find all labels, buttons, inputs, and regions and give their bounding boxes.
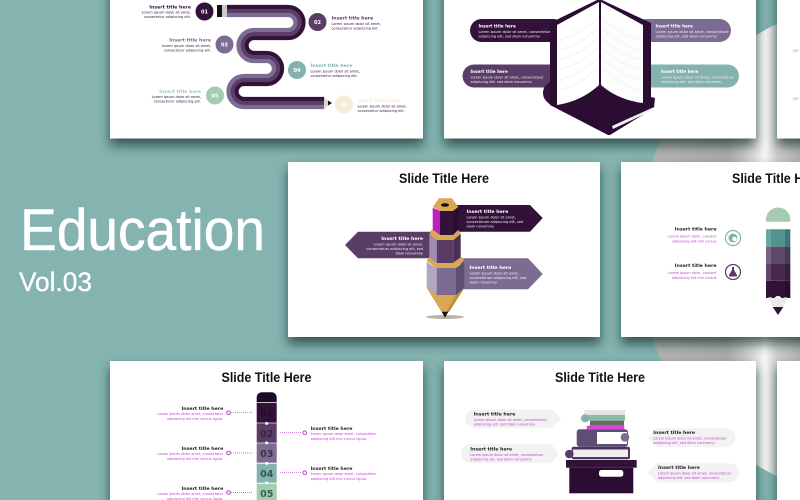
pill bottom right: adipiscing elit, sed diam nonummy	[661, 80, 722, 84]
pill bottom left: adipiscing elit, sed diam nonummy	[470, 80, 532, 84]
bubble 4	[648, 463, 739, 482]
icon: stacked pencil	[426, 198, 464, 319]
label 02: Insert title here	[311, 426, 352, 432]
item: flask: adipiscing elit min cursus	[672, 276, 717, 280]
slide panel: book stack	[444, 361, 756, 500]
slide panel: vertical pencil	[621, 162, 800, 337]
label 04	[280, 466, 377, 481]
label 05: Insert title here	[182, 486, 223, 492]
item: flask	[668, 263, 740, 280]
heading: Slide Title Here	[555, 370, 645, 385]
step 03: consectetur adipiscing elit.	[164, 48, 211, 52]
subtitle: Vol.03	[19, 267, 92, 297]
item: globe	[668, 226, 740, 246]
bubble 1	[466, 409, 561, 428]
heading: Slide Title Here	[222, 370, 312, 385]
arrow: bottom right: consectetuer adipiscing elit, sed	[470, 276, 526, 280]
arrow: bottom right: diam nonummy	[470, 280, 497, 284]
arrow: middle left: Lorem ipsum dolor sit amet,	[374, 242, 423, 246]
label 01: Insert title here	[182, 406, 223, 412]
label 04: adipiscing elit min cursus ligula.	[311, 477, 367, 481]
item: globe: Insert title here	[675, 226, 716, 232]
step 05: Lorem ipsum dolor sit amet,	[152, 95, 201, 99]
step 04	[288, 61, 360, 79]
pill top right	[635, 19, 731, 42]
bubble 2: adipiscing elit, sed diam nonummy	[470, 458, 532, 462]
step 03	[162, 36, 234, 54]
numbered column: 01	[260, 408, 273, 420]
label 01: Lorem ipsum dolor amet, consectetur	[157, 412, 224, 416]
step 01	[142, 2, 214, 20]
pill bottom right: Lorem ipsum dolor sit amet, consectetuer	[661, 76, 735, 80]
step 04: 04	[294, 68, 301, 74]
arrow: bottom right	[460, 258, 543, 289]
arrow: top right	[453, 205, 543, 232]
item: globe: adipiscing elit min cursus	[672, 240, 717, 244]
label 03: Lorem ipsum dolor amet, consectetur	[157, 452, 224, 456]
step 04: consectetur adipiscing elit.	[310, 74, 358, 78]
step 03: Insert title here	[169, 38, 211, 44]
step 03: Lorem ipsum dolor sit amet,	[162, 44, 211, 48]
label 05	[157, 486, 253, 500]
item: globe: Lorem ipsum dolor, consect	[668, 234, 717, 238]
step 02	[308, 13, 381, 31]
label 03: adipiscing elit min cursus ligula.	[167, 457, 223, 461]
bubble 2: Lorem ipsum dolor sit amet, consectetuer	[470, 453, 544, 457]
step 02: 02	[314, 20, 321, 26]
bubble 4: Insert title here	[658, 465, 700, 471]
arrow: top right: consectetuer adipiscing elit, sed	[466, 220, 523, 224]
step 06: consectetur adipiscing elit.	[358, 109, 405, 113]
step 05: 05	[212, 93, 219, 99]
bubble 2	[461, 444, 559, 463]
step 04: Insert title here	[310, 63, 352, 69]
arrow: top right: Lorem ipsum dolor sit amet,	[466, 216, 516, 220]
numbered column: 03	[260, 449, 273, 460]
label 04: Insert title here	[311, 466, 352, 472]
step 06: Lorem ipsum dolor sit amet,	[358, 104, 407, 108]
pill top left: Insert title here	[478, 24, 516, 28]
arrow: middle left: Insert title here	[381, 236, 423, 242]
arrow: middle left: consectetuer adipiscing elit, sed	[366, 247, 423, 251]
slide panel: open book	[444, 0, 756, 138]
numbered column: 02	[260, 429, 273, 440]
arrow: bottom right: Lorem ipsum dolor sit amet,	[470, 272, 519, 276]
step 01: Lorem ipsum dolor sit amet,	[142, 10, 191, 14]
pill top left	[470, 19, 565, 42]
slide panel: winding pencil	[110, 0, 423, 138]
bubble 3: Insert title here	[653, 430, 695, 436]
bubble 2: Insert title here	[470, 446, 512, 452]
step 06: 06	[341, 102, 348, 108]
bubble 3: Lorem ipsum dolor sit amet, consectetuer	[653, 436, 727, 440]
bubble 4: adipiscing elit, sed diam nonummy	[658, 476, 719, 480]
slide panel: right top partial: Lor	[793, 96, 799, 100]
icon: vertical pencil	[766, 208, 790, 315]
label 03: Insert title here	[182, 446, 223, 452]
step 05: Insert title here	[159, 89, 201, 95]
label 02: adipiscing elit min cursus ligula.	[311, 437, 367, 441]
slide panel: pencil signposts	[288, 162, 600, 337]
step 04: Lorem ipsum dolor sit amet,	[310, 70, 360, 74]
bubble 1: adipiscing elit, sed diam nonummy	[474, 422, 535, 426]
icon: open book	[543, 0, 655, 135]
label 01	[157, 406, 253, 421]
label 01: adipiscing elit min cursus ligula.	[167, 417, 223, 421]
pill bottom left	[462, 64, 562, 88]
label 03	[157, 446, 253, 461]
step 03: 03	[221, 42, 228, 48]
main title: Education	[20, 198, 265, 263]
bubble 3	[648, 428, 736, 447]
step 02: Insert title here	[332, 16, 373, 22]
grey ring decoration	[636, 0, 800, 500]
pill bottom right	[640, 64, 739, 88]
pill bottom left: Lorem ipsum dolor sit amet, consectetuer	[470, 76, 544, 80]
numbered column: 04	[260, 469, 274, 480]
pill bottom right: Insert title here	[661, 69, 698, 74]
step 05	[152, 86, 224, 104]
label 04: Lorem ipsum dolor amet, consectetur	[311, 472, 377, 476]
pill top right: adipiscing elit, sed diam nonummy	[656, 34, 717, 38]
pill top right: Insert title here	[656, 24, 693, 28]
pill top left: adipiscing elit, sed diam nonummy	[478, 34, 540, 38]
pill top left: Lorem ipsum dolor sit amet, consectetuer	[478, 30, 552, 34]
step 05: consectetur adipiscing elit.	[154, 100, 201, 104]
arrow: middle left	[345, 232, 432, 258]
winding pencil	[217, 5, 332, 109]
bubble 4: Lorem ipsum dolor sit amet, consectetuer	[658, 472, 732, 476]
numbered column	[257, 392, 277, 500]
numbered column: 05	[260, 489, 273, 500]
step 01: Insert title here	[149, 4, 191, 10]
step 01: consectetur adipiscing elit.	[144, 15, 191, 19]
slide panel: right top partial: Lor	[793, 48, 799, 52]
arrow: top right: Insert title here	[466, 209, 508, 215]
arrow: bottom right: Insert title here	[470, 265, 511, 271]
heading: Slide Title Here	[399, 171, 489, 186]
bubble 1: Lorem ipsum dolor sit amet, consectetuer	[474, 418, 548, 422]
label 05: Lorem ipsum dolor amet, consectetur	[157, 492, 224, 496]
slide panel: numbered column	[110, 361, 423, 500]
step 02: Lorem ipsum dolor sit amet,	[332, 22, 381, 26]
pill bottom left: Insert title here	[470, 69, 508, 74]
bubble 3: adipiscing elit, sed diam nonummy	[653, 441, 715, 445]
slide panel: right top partial	[777, 0, 800, 138]
arrow: top right: diam nonummy	[466, 224, 494, 228]
label 02: Lorem ipsum dolor amet, consectetur	[311, 432, 377, 436]
item: flask: Lorem ipsum dolor, consect	[668, 271, 717, 275]
pill top right: Lorem ipsum dolor sit amet, consectetuer	[656, 30, 729, 34]
label 02	[280, 426, 377, 441]
step 06: Insert title here	[358, 98, 399, 104]
step 02: consectetur adipiscing elit.	[332, 26, 379, 30]
slide panel: right bottom partial	[777, 361, 800, 500]
step 06	[335, 96, 407, 114]
icon: books on a box	[565, 410, 637, 493]
step 01: 01	[201, 9, 208, 15]
arrow: middle left: diam nonummy	[395, 252, 423, 256]
item: flask: Insert title here	[675, 263, 716, 269]
bubble 1: Insert title here	[474, 412, 515, 418]
